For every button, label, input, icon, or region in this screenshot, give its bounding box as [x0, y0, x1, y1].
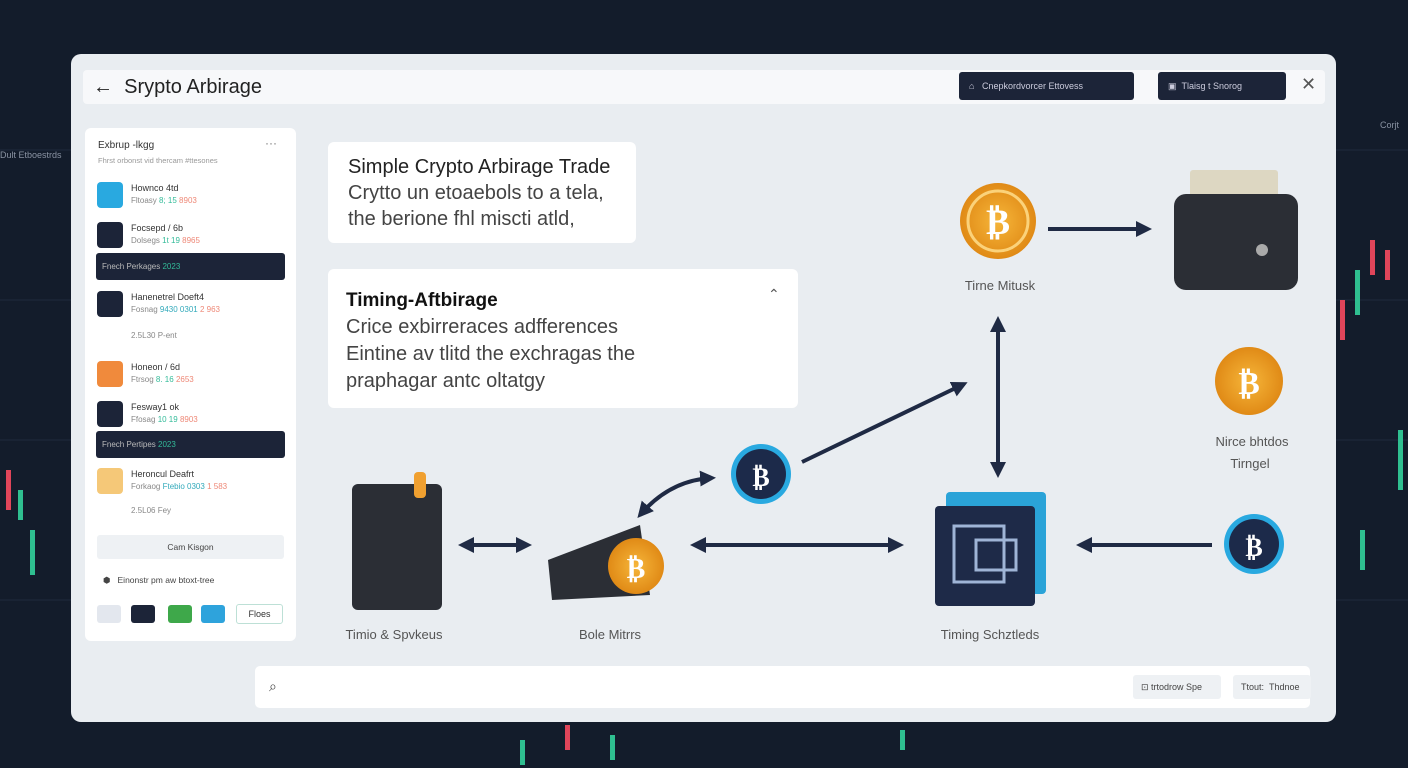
button: trading — [1158, 72, 1286, 100]
panel: sidebar: ⬢ Einonstr pm aw btoxt-tree — [103, 575, 214, 585]
icon: blue coin mid: ₿ — [752, 463, 770, 493]
background chart: Corjt — [1380, 120, 1400, 130]
panel: sidebar: Fhrst orbonst vid thercam #ttesones — [98, 156, 218, 165]
card: timing arbitrage: Timing-Aftbirage — [346, 290, 498, 311]
card: timing arbitrage: ⌃ — [768, 286, 780, 302]
panel: sidebar: Ftrsog 8. 16 2653 — [131, 375, 194, 384]
icon: wallet with coin: ₿ — [627, 552, 645, 585]
panel: sidebar: Hanenetrel Doeft4 — [131, 292, 204, 302]
card: timing arbitrage — [328, 269, 798, 408]
icon: bitcoin top: ₿ — [986, 202, 1010, 243]
button: trading: ▣ Tlaisg t Snorog — [1168, 81, 1242, 91]
panel: sidebar: Forkaog Ftebio 0303 1 583 — [131, 482, 227, 491]
button: exchange: ⌂ Cnepkordvorcer Ettovess — [969, 81, 1083, 91]
labels: Bole Mitrrs — [579, 627, 642, 642]
main panel: Fnech Perkages 2023 — [102, 262, 180, 271]
icon: bitcoin top — [960, 183, 1036, 259]
icon: exchange box — [935, 492, 1046, 606]
main panel: Fnech Pertipes 2023 — [102, 440, 176, 449]
panel: sidebar: 2.5L30 P-ent — [131, 331, 177, 340]
card: timing arbitrage: praphagar antc oltatgy — [346, 370, 545, 392]
card: simple trade: Crytto un etoaebols to a tela, — [348, 182, 604, 204]
search bar — [255, 666, 1310, 708]
list items: Hownco 4td — [131, 183, 179, 193]
card: simple trade: the berione fhl miscti atld, — [348, 208, 575, 230]
search bar: ⊡ trtodrow Spe — [1141, 682, 1202, 692]
arrows — [462, 229, 1212, 545]
title: ← Srypto Arbirage — [93, 76, 262, 98]
labels: Nirce bhtdos — [1216, 434, 1289, 449]
search bar: Ttout: Thdnoe — [1241, 682, 1300, 692]
card: timing arbitrage: Crice exbirreraces adfferences — [346, 316, 618, 338]
card: simple trade — [328, 142, 636, 243]
list items — [97, 182, 197, 208]
panel: sidebar: Fesway1 ok — [131, 402, 179, 412]
panel: sidebar: Floes — [248, 609, 270, 619]
panel: sidebar: Ffosag 10 19 8903 — [131, 415, 198, 424]
icon: wallet with coin — [548, 525, 664, 600]
labels: Timing Schztleds — [941, 627, 1040, 642]
icon: phone wallet — [352, 472, 442, 610]
panel: sidebar: Heroncul Deafrt — [131, 469, 194, 479]
panel: sidebar: ··· — [265, 136, 277, 150]
list items: Fltoasy 8; 15 8903 — [131, 196, 197, 205]
button: exchange — [959, 72, 1134, 100]
search bar: ⌕ — [269, 678, 277, 694]
panel: sidebar: Exbrup -lkgg — [98, 140, 154, 151]
icon: bitcoin right: ₿ — [1238, 364, 1260, 402]
labels: Tirngel — [1230, 456, 1270, 471]
labels: Tirne Mitusk — [965, 278, 1036, 293]
icon: bitcoin right — [1215, 347, 1283, 415]
icon: blue coin right: ₿ — [1245, 533, 1263, 563]
panel: sidebar: Honeon / 6d — [131, 362, 180, 372]
close icon: ✕ — [1301, 74, 1316, 94]
header bar — [83, 70, 1325, 104]
main panel — [71, 54, 1336, 722]
panel: sidebar: Fosnag 9430 0301 2 963 — [131, 305, 220, 314]
background chart: Dult Etboestrds — [0, 150, 62, 160]
icon: blue coin right — [1224, 514, 1284, 574]
labels: Timio & Spvkeus — [345, 627, 443, 642]
labels — [345, 278, 1289, 642]
card: simple trade: Simple Crypto Arbirage Trade — [348, 156, 610, 178]
card: timing arbitrage: Eintine av tlitd the exchragas the — [346, 343, 635, 365]
panel: sidebar: 2.5L06 Fey — [131, 506, 171, 515]
panel: sidebar — [85, 128, 296, 641]
panel: sidebar: Dolsegs 1t 19 8965 — [131, 236, 200, 245]
icon: wallet top right — [1174, 170, 1298, 290]
panel: sidebar: Cam Kisgon — [167, 542, 214, 552]
panel: sidebar: Focsepd / 6b — [131, 223, 183, 233]
icon: blue coin mid — [731, 444, 791, 504]
